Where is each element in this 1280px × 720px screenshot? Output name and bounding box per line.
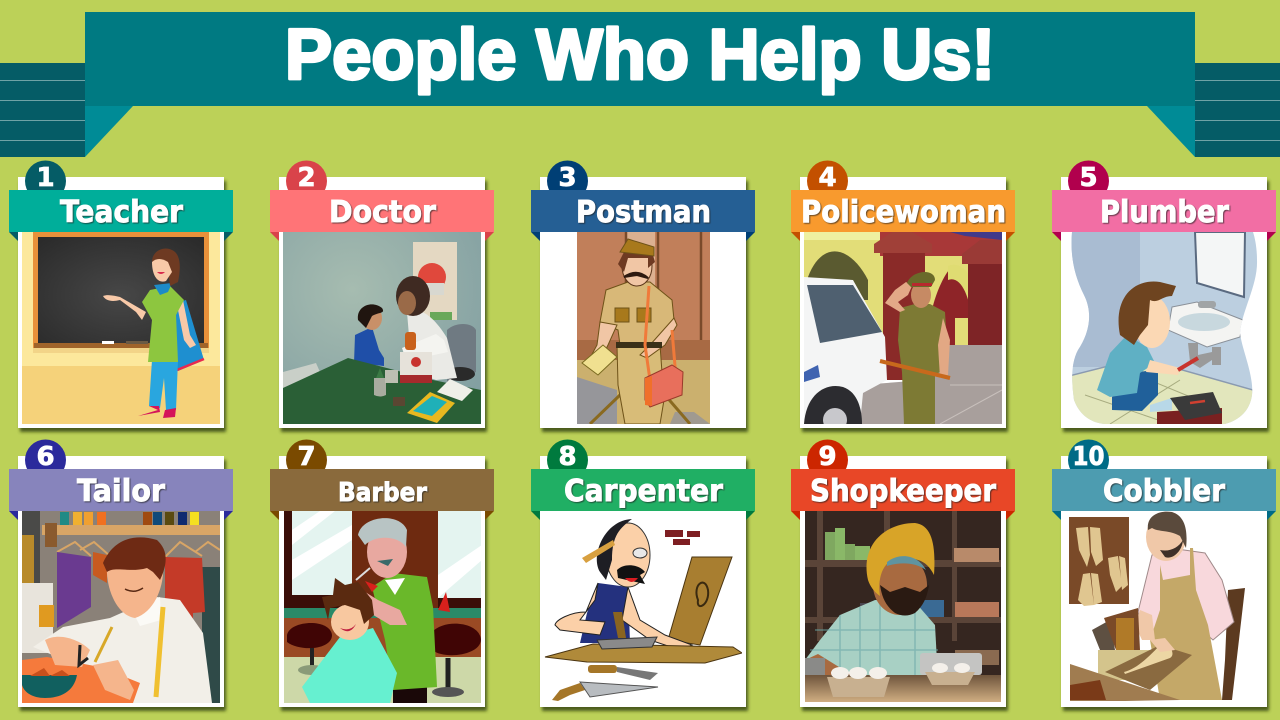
number badge 6: 6 bbox=[36, 442, 55, 472]
card 10: Cobbler bbox=[1052, 440, 1276, 711]
card 5: Plumber bbox=[1052, 160, 1276, 432]
fold tabs bbox=[531, 232, 755, 241]
number badge 5 bbox=[1068, 160, 1109, 202]
right side ribbon bbox=[1195, 63, 1280, 157]
number badge 1 bbox=[25, 160, 66, 202]
ribbon: Tailor: Tailor bbox=[77, 474, 165, 509]
card 4: Policewoman bbox=[791, 160, 1015, 432]
illustration: plumber fixing sink bbox=[1061, 232, 1267, 424]
illustration: cobbler making shoes bbox=[1069, 512, 1245, 702]
ribbon: Barber bbox=[270, 469, 494, 511]
card 1: Teacher bbox=[9, 160, 233, 432]
number badge 7: 7 bbox=[297, 442, 316, 472]
card 2: Doctor bbox=[270, 160, 494, 432]
fold tabs bbox=[9, 232, 233, 241]
ribbon: Carpenter: Carpenter bbox=[564, 474, 723, 509]
card 6: Tailor bbox=[9, 440, 233, 711]
number badge 4 bbox=[807, 160, 848, 202]
illustration: barber cutting boy's hair bbox=[284, 511, 482, 703]
ribbon: Cobbler bbox=[1052, 469, 1276, 511]
number badge 2: 2 bbox=[297, 163, 316, 193]
number badge 8 bbox=[547, 440, 588, 480]
number badge 3 bbox=[547, 160, 588, 202]
left side ribbon bbox=[0, 63, 85, 157]
number badge 4: 4 bbox=[818, 163, 837, 193]
illustration: postman bbox=[577, 232, 710, 424]
number badge 9 bbox=[807, 440, 848, 480]
fold tabs bbox=[1052, 232, 1276, 241]
number badge 10 bbox=[1068, 440, 1109, 480]
illustration: carpenter at bench bbox=[545, 519, 742, 701]
illustration: tailor sewing bbox=[22, 511, 220, 703]
card 9: Shopkeeper bbox=[791, 440, 1015, 711]
ribbon: Postman bbox=[531, 190, 755, 232]
number badge 1: 1 bbox=[36, 163, 55, 193]
card 8: Carpenter bbox=[531, 440, 755, 711]
ribbon: Cobbler: Cobbler bbox=[1103, 474, 1225, 509]
title: People Who Help Us! bbox=[285, 16, 995, 95]
ribbon: Teacher bbox=[9, 190, 233, 232]
number badge 10: 10 bbox=[1072, 442, 1104, 472]
illustration: shopkeeper with eggs bbox=[805, 511, 1001, 702]
ribbon: Carpenter bbox=[531, 469, 755, 511]
number badge 2 bbox=[286, 160, 327, 202]
ribbon: Doctor bbox=[270, 190, 494, 232]
fold tabs bbox=[791, 232, 1015, 241]
card 7: Barber bbox=[270, 440, 494, 711]
number badge 7 bbox=[286, 440, 327, 480]
number badge 8: 8 bbox=[558, 442, 577, 472]
fold tabs bbox=[791, 511, 1015, 520]
number badge 5: 5 bbox=[1079, 163, 1098, 193]
illustration: policewoman saluting bbox=[804, 232, 1002, 432]
ribbon: Barber: Barber bbox=[338, 478, 427, 508]
ribbon: Policewoman: Policewoman bbox=[801, 195, 1006, 230]
title banner bbox=[85, 12, 1195, 157]
fold tabs bbox=[270, 232, 494, 241]
ribbon: Plumber bbox=[1052, 190, 1276, 232]
ribbon: Postman: Postman bbox=[576, 195, 711, 230]
ribbon: Doctor: Doctor bbox=[329, 195, 436, 230]
card 3: Postman bbox=[531, 160, 755, 432]
illustration: teacher at blackboard bbox=[22, 232, 220, 424]
number badge 3: 3 bbox=[558, 163, 577, 193]
number badge 6 bbox=[25, 440, 66, 480]
ribbon: Teacher: Teacher bbox=[60, 195, 183, 230]
fold tabs bbox=[1052, 511, 1276, 520]
ribbon: Shopkeeper: Shopkeeper bbox=[810, 474, 996, 509]
fold tabs bbox=[531, 511, 755, 520]
ribbon: Plumber: Plumber bbox=[1100, 195, 1229, 230]
illustration: doctor and child bbox=[283, 232, 481, 424]
ribbon: Tailor bbox=[9, 469, 233, 511]
fold tabs bbox=[9, 511, 233, 520]
fold tabs bbox=[270, 511, 494, 520]
number badge 9: 9 bbox=[818, 442, 837, 472]
